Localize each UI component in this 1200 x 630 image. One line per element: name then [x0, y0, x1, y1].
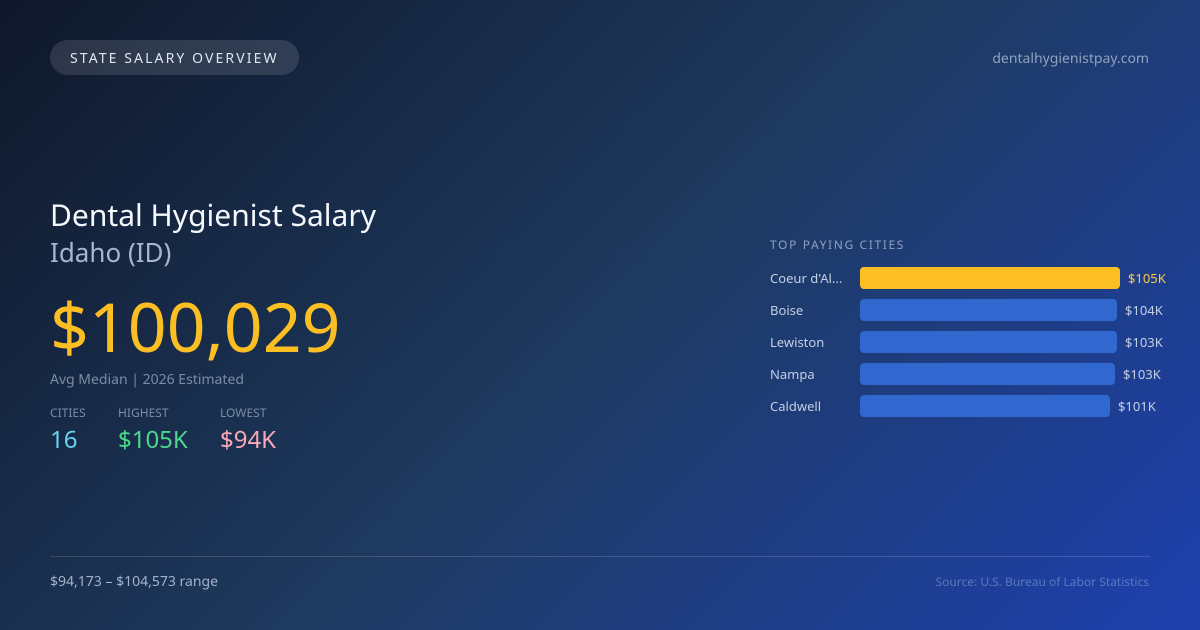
bar: Nampa: Nampa	[770, 365, 815, 383]
stat: lowest: LOWEST	[220, 404, 266, 421]
panel: top paying cities	[770, 236, 1166, 417]
bar: Coeur d'Alene	[770, 267, 1166, 289]
bar: Coeur d'Alene: $105K	[1128, 269, 1166, 287]
stat: highest	[118, 404, 188, 456]
bar: Coeur d'Alene: Coeur d'Al...	[770, 269, 842, 287]
bar: Nampa: $103K	[1123, 365, 1161, 383]
site url: dentalhygienistpay.com	[992, 49, 1149, 68]
subtitle: state: Idaho (ID)	[50, 234, 171, 270]
badge: state salary overview: STATE SALARY OVERVIEW	[70, 49, 279, 68]
source note: Source: U.S. Bureau of Labor Statistics	[936, 573, 1149, 590]
bar: Boise	[770, 299, 1163, 321]
salary caption: Avg Median | 2026 Estimated	[50, 370, 244, 389]
badge: state salary overview	[50, 40, 299, 75]
stat: highest: $105K	[118, 423, 188, 456]
stat: cities: CITIES	[50, 404, 86, 421]
bar: Lewiston: $103K	[1125, 333, 1163, 351]
bar: Caldwell	[770, 395, 1156, 417]
stat: cities	[50, 404, 86, 456]
stat: cities: 16	[50, 423, 77, 456]
bar: Lewiston	[770, 331, 1163, 353]
title: Dental Hygienist Salary	[50, 194, 376, 235]
stat: lowest: $94K	[220, 423, 276, 456]
average salary figure: $100,029	[50, 279, 340, 372]
salary range: $94,173 – $104,573 range	[50, 572, 218, 591]
bar: Lewiston: Lewiston	[770, 333, 824, 351]
bar: Caldwell: $101K	[1118, 397, 1156, 415]
bar: Nampa	[770, 363, 1161, 385]
chart heading: TOP PAYING CITIES	[770, 236, 905, 253]
stat: lowest	[220, 404, 276, 456]
bar: Boise: $104K	[1125, 301, 1163, 319]
bar: Caldwell: Caldwell	[770, 397, 821, 415]
bar: Boise: Boise	[770, 301, 803, 319]
stat: highest: HIGHEST	[118, 404, 169, 421]
